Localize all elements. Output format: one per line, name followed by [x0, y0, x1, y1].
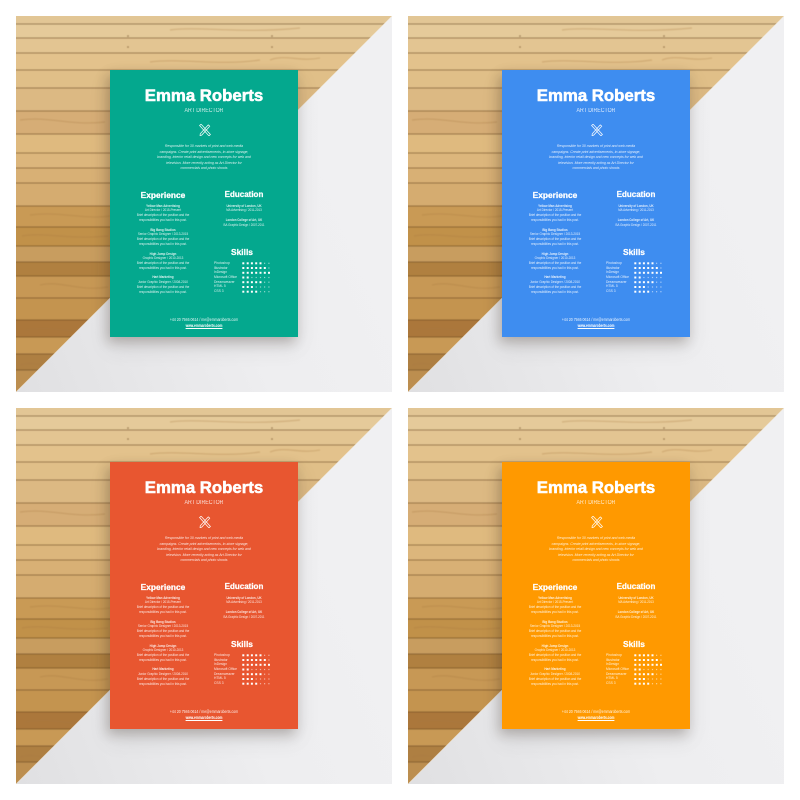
experience item 2: responsibilities you had in this post. [531, 634, 579, 638]
icon: crossed pencil and ruler [591, 124, 603, 136]
experience item 3: Graphic Designer / 2010-2013 [535, 256, 575, 260]
experience item 4 [137, 275, 190, 294]
profile summary: campaigns. Create print advertisements, in-store signage, [160, 149, 248, 154]
education item 2 [224, 218, 264, 227]
experience item 4: Brief description of the position and the [137, 677, 189, 681]
experience item 1: Art Director / 2015-Present [537, 208, 573, 212]
profile summary: commercials and photo shoots [181, 165, 227, 170]
experience item 1 [137, 596, 190, 614]
experience item 2 [137, 620, 190, 638]
experience item 1: Brief description of the position and the [529, 605, 581, 609]
experience heading: Experience [141, 190, 185, 200]
resume card: orange [502, 462, 690, 729]
skills labels: Dreamweaver [606, 280, 627, 284]
experience item 2: Brief description of the position and the [137, 629, 189, 633]
experience item 1: Brief description of the position and the [529, 213, 581, 217]
education item 2: London College of Art, UK [226, 610, 262, 614]
experience item 4: Hart Marketing [544, 275, 566, 279]
experience item 1: Brief description of the position and the [137, 605, 189, 609]
skills labels: InDesign [214, 270, 227, 274]
profile summary: Responsible for 30 markets of print and web media [557, 143, 635, 148]
experience item 1: responsibilities you had in this post. [531, 218, 579, 222]
skills labels: Dreamweaver [606, 672, 627, 676]
profile summary [157, 535, 251, 562]
skills labels: HTML 5 [606, 284, 618, 288]
experience item 3: Brief description of the position and the [529, 653, 581, 657]
profile summary: television. More recently acting as Art Director for [166, 552, 242, 557]
experience item 1: responsibilities you had in this post. [139, 610, 187, 614]
profile summary: Responsible for 30 markets of print and web media [557, 535, 635, 540]
skills labels [214, 261, 237, 293]
experience item 1: Art Director / 2015-Present [145, 208, 181, 212]
experience item 4: responsibilities you had in this post. [139, 682, 187, 686]
skills rating dots [242, 654, 270, 685]
experience item 1: Yellow Man Advertising [146, 596, 180, 600]
skills labels: Photoshop [214, 653, 230, 657]
experience item 3 [529, 252, 582, 270]
education item 1 [618, 204, 654, 212]
education item 1: MA Advertising / 2011-2013 [618, 600, 654, 604]
experience item 4: responsibilities you had in this post. [139, 290, 187, 294]
experience item 1 [514, 596, 596, 615]
experience item 3: Brief description of the position and the [137, 261, 189, 265]
experience item 4: Junior Graphic Designer / 2008-2010 [530, 280, 580, 284]
experience item 1: Yellow Man Advertising [146, 204, 180, 208]
skills labels: HTML 5 [214, 676, 226, 680]
profile summary: commercials and photo shoots [573, 165, 619, 170]
education item 1: University of London, UK [618, 596, 654, 600]
profile summary: Responsible for 30 markets of print and web media [165, 143, 243, 148]
experience item 4: Brief description of the position and the [137, 285, 189, 289]
skills labels: InDesign [606, 662, 619, 666]
contact line: +44 20 7946 0614 / me@emmaroberts.com [562, 317, 630, 322]
website link: www.emmaroberts.com [186, 715, 222, 720]
education heading: Education [225, 582, 263, 590]
experience item 1: Yellow Man Advertising [538, 596, 572, 600]
name heading: Emma Roberts [145, 86, 263, 105]
profile summary: Responsible for 30 markets of print and web media [165, 535, 243, 540]
experience item 2: Senior Graphic Designer / 2013-2015 [530, 624, 580, 628]
education item 2 [601, 610, 671, 620]
experience item 4: Brief description of the position and the [529, 285, 581, 289]
skills labels: CSS 3 [214, 681, 224, 685]
skills heading: Skills [623, 639, 645, 649]
education item 2: London College of Art, UK [226, 218, 262, 222]
education item 2: BA Graphic Design / 2007-2011 [616, 223, 656, 227]
icon: crossed pencil and ruler [199, 516, 211, 528]
education item 1 [226, 204, 262, 212]
experience heading: Experience [533, 190, 577, 200]
skills labels [606, 261, 629, 293]
profile summary: commercials and photo shoots [573, 557, 619, 562]
skills labels: Illustrator [606, 658, 620, 662]
experience item 4 [514, 667, 596, 686]
skills labels: Dreamweaver [214, 280, 235, 284]
experience item 2: responsibilities you had in this post. [139, 634, 187, 638]
skills labels: CSS 3 [606, 289, 616, 293]
panel: teal resume mockup [16, 16, 392, 392]
skills labels: CSS 3 [214, 289, 224, 293]
name heading: Emma Roberts [145, 478, 263, 497]
profile summary [157, 143, 251, 170]
icon: crossed pencil and ruler [199, 124, 211, 136]
resume card: teal [110, 70, 298, 337]
experience item 4: responsibilities you had in this post. [531, 290, 579, 294]
education item 1: University of London, UK [618, 204, 654, 208]
website link: www.emmaroberts.com [186, 323, 222, 328]
experience item 2: Big Bang Studios [150, 620, 176, 624]
skills heading: Skills [231, 639, 253, 649]
education item 2: BA Graphic Design / 2007-2011 [616, 615, 656, 619]
experience item 1: responsibilities you had in this post. [139, 218, 187, 222]
experience item 3: High Jump Design [542, 252, 568, 256]
skills labels: Dreamweaver [214, 672, 235, 676]
skills labels [214, 653, 237, 685]
profile summary: branding, interior retail design and new concepts for web and [549, 546, 643, 551]
experience item 3: Graphic Designer / 2010-2013 [535, 648, 575, 652]
skills rating dots [634, 262, 662, 293]
experience item 3: Graphic Designer / 2010-2013 [143, 256, 183, 260]
experience item 4: Hart Marketing [544, 667, 566, 671]
profile summary: television. More recently acting as Art Director for [166, 160, 242, 165]
education heading: Education [617, 190, 655, 198]
panel: orange resume mockup [408, 408, 784, 784]
experience item 4: Junior Graphic Designer / 2008-2010 [138, 280, 188, 284]
experience item 1: Art Director / 2015-Present [145, 600, 181, 604]
experience item 4: Brief description of the position and the [529, 677, 581, 681]
experience item 3: Graphic Designer / 2010-2013 [143, 648, 183, 652]
skills labels: Illustrator [606, 266, 620, 270]
skills labels: Illustrator [214, 266, 228, 270]
experience item 2 [529, 228, 582, 246]
education item 1 [601, 596, 671, 605]
skills rating dots [242, 262, 270, 293]
experience item 1: Art Director / 2015-Present [537, 600, 573, 604]
experience item 4: responsibilities you had in this post. [531, 682, 579, 686]
experience item 3: Brief description of the position and the [137, 653, 189, 657]
experience item 2: Brief description of the position and the [137, 237, 189, 241]
skills labels: Photoshop [606, 261, 622, 265]
experience item 1 [529, 204, 582, 222]
wood and grey backdrop [16, 408, 392, 784]
profile summary [549, 143, 643, 170]
profile summary: branding, interior retail design and new concepts for web and [157, 154, 251, 159]
skills labels: Illustrator [214, 658, 228, 662]
experience item 2: Big Bang Studios [542, 228, 568, 232]
experience item 3: responsibilities you had in this post. [531, 266, 579, 270]
icon: crossed pencil and ruler [591, 516, 603, 528]
profile summary [549, 535, 643, 562]
job title: ART DIRECTOR [577, 500, 615, 506]
experience item 1 [137, 204, 190, 222]
profile summary: branding, interior retail design and new concepts for web and [157, 546, 251, 551]
profile summary: campaigns. Create print advertisements, in-store signage, [552, 149, 640, 154]
wood and grey backdrop [408, 16, 784, 392]
profile summary: television. More recently acting as Art Director for [558, 160, 634, 165]
experience item 3 [514, 644, 596, 663]
contact line: +44 20 7946 0614 / me@emmaroberts.com [170, 317, 238, 322]
education item 2: BA Graphic Design / 2007-2011 [224, 223, 264, 227]
experience item 1: Yellow Man Advertising [538, 204, 572, 208]
experience item 3: Brief description of the position and the [529, 261, 581, 265]
skills labels: HTML 5 [606, 676, 618, 680]
experience item 3: High Jump Design [150, 252, 176, 256]
job title: ART DIRECTOR [577, 108, 615, 114]
job title: ART DIRECTOR [185, 500, 223, 506]
skills labels: Microsoft Office [606, 667, 629, 671]
education item 2: BA Graphic Design / 2007-2011 [224, 615, 264, 619]
profile summary: branding, interior retail design and new concepts for web and [549, 154, 643, 159]
profile summary: television. More recently acting as Art Director for [558, 552, 634, 557]
experience heading: Experience [141, 582, 185, 592]
education item 1: University of London, UK [226, 596, 262, 600]
skills heading: Skills [231, 247, 253, 257]
contact line: +44 20 7946 0614 / me@emmaroberts.com [170, 709, 238, 714]
skills labels: Microsoft Office [214, 667, 237, 671]
experience item 1: Brief description of the position and the [137, 213, 189, 217]
experience item 2 [137, 228, 190, 246]
experience item 2: Big Bang Studios [150, 228, 176, 232]
skills rating dots [632, 653, 662, 686]
website link: www.emmaroberts.com [578, 715, 614, 720]
skills labels: InDesign [214, 662, 227, 666]
experience item 3: responsibilities you had in this post. [139, 266, 187, 270]
skills labels: Photoshop [214, 261, 230, 265]
experience item 4: Junior Graphic Designer / 2008-2010 [530, 672, 580, 676]
education item 2: London College of Art, UK [618, 610, 654, 614]
profile summary: commercials and photo shoots [181, 557, 227, 562]
name heading: Emma Roberts [537, 86, 655, 105]
education item 2 [616, 218, 656, 227]
experience heading: Experience [533, 582, 577, 592]
experience item 4: Hart Marketing [152, 667, 174, 671]
education item 1: MA Advertising / 2011-2013 [618, 208, 654, 212]
resume card: red [110, 462, 298, 729]
experience item 2: Big Bang Studios [542, 620, 568, 624]
skills labels [606, 653, 629, 686]
education item 1: University of London, UK [226, 204, 262, 208]
wood and grey backdrop [408, 408, 784, 784]
name heading: Emma Roberts [537, 478, 655, 497]
experience item 2: responsibilities you had in this post. [531, 242, 579, 246]
experience item 2: Senior Graphic Designer / 2013-2015 [530, 232, 580, 236]
experience item 2 [514, 620, 596, 639]
experience item 4 [137, 667, 190, 686]
experience item 4: Hart Marketing [152, 275, 174, 279]
education heading: Education [225, 190, 263, 198]
resume card: blue [502, 70, 690, 337]
experience item 4: Junior Graphic Designer / 2008-2010 [138, 672, 188, 676]
skills labels: Photoshop [606, 653, 622, 657]
experience item 2: Brief description of the position and the [529, 629, 581, 633]
wood and grey backdrop [16, 16, 392, 392]
panel: red resume mockup [16, 408, 392, 784]
contact line: +44 20 7946 0614 / me@emmaroberts.com [562, 709, 630, 714]
experience item 3: High Jump Design [542, 644, 568, 648]
skills heading: Skills [623, 247, 645, 257]
education item 2 [224, 610, 264, 619]
education item 1: MA Advertising / 2011-2013 [226, 208, 262, 212]
education heading: Education [617, 582, 655, 590]
skills labels: Microsoft Office [606, 275, 629, 279]
experience item 3: responsibilities you had in this post. [139, 658, 187, 662]
education item 1 [226, 596, 262, 604]
experience item 3 [137, 252, 190, 270]
skills labels: Microsoft Office [214, 275, 237, 279]
education item 2: London College of Art, UK [618, 218, 654, 222]
experience item 2: responsibilities you had in this post. [139, 242, 187, 246]
skills labels: CSS 3 [606, 681, 616, 685]
skills labels: HTML 5 [214, 284, 226, 288]
experience item 3: responsibilities you had in this post. [531, 658, 579, 662]
profile summary: campaigns. Create print advertisements, in-store signage, [552, 541, 640, 546]
experience item 3: High Jump Design [150, 644, 176, 648]
website link: www.emmaroberts.com [578, 323, 614, 328]
experience item 2: Senior Graphic Designer / 2013-2015 [138, 624, 188, 628]
experience item 4 [529, 275, 582, 294]
skills labels: InDesign [606, 270, 619, 274]
experience item 2: Senior Graphic Designer / 2013-2015 [138, 232, 188, 236]
education item 1: MA Advertising / 2011-2013 [226, 600, 262, 604]
experience item 1: responsibilities you had in this post. [531, 610, 579, 614]
job title: ART DIRECTOR [185, 108, 223, 114]
experience item 2: Brief description of the position and the [529, 237, 581, 241]
panel: blue resume mockup [408, 16, 784, 392]
profile summary: campaigns. Create print advertisements, in-store signage, [160, 541, 248, 546]
experience item 3 [137, 644, 190, 662]
